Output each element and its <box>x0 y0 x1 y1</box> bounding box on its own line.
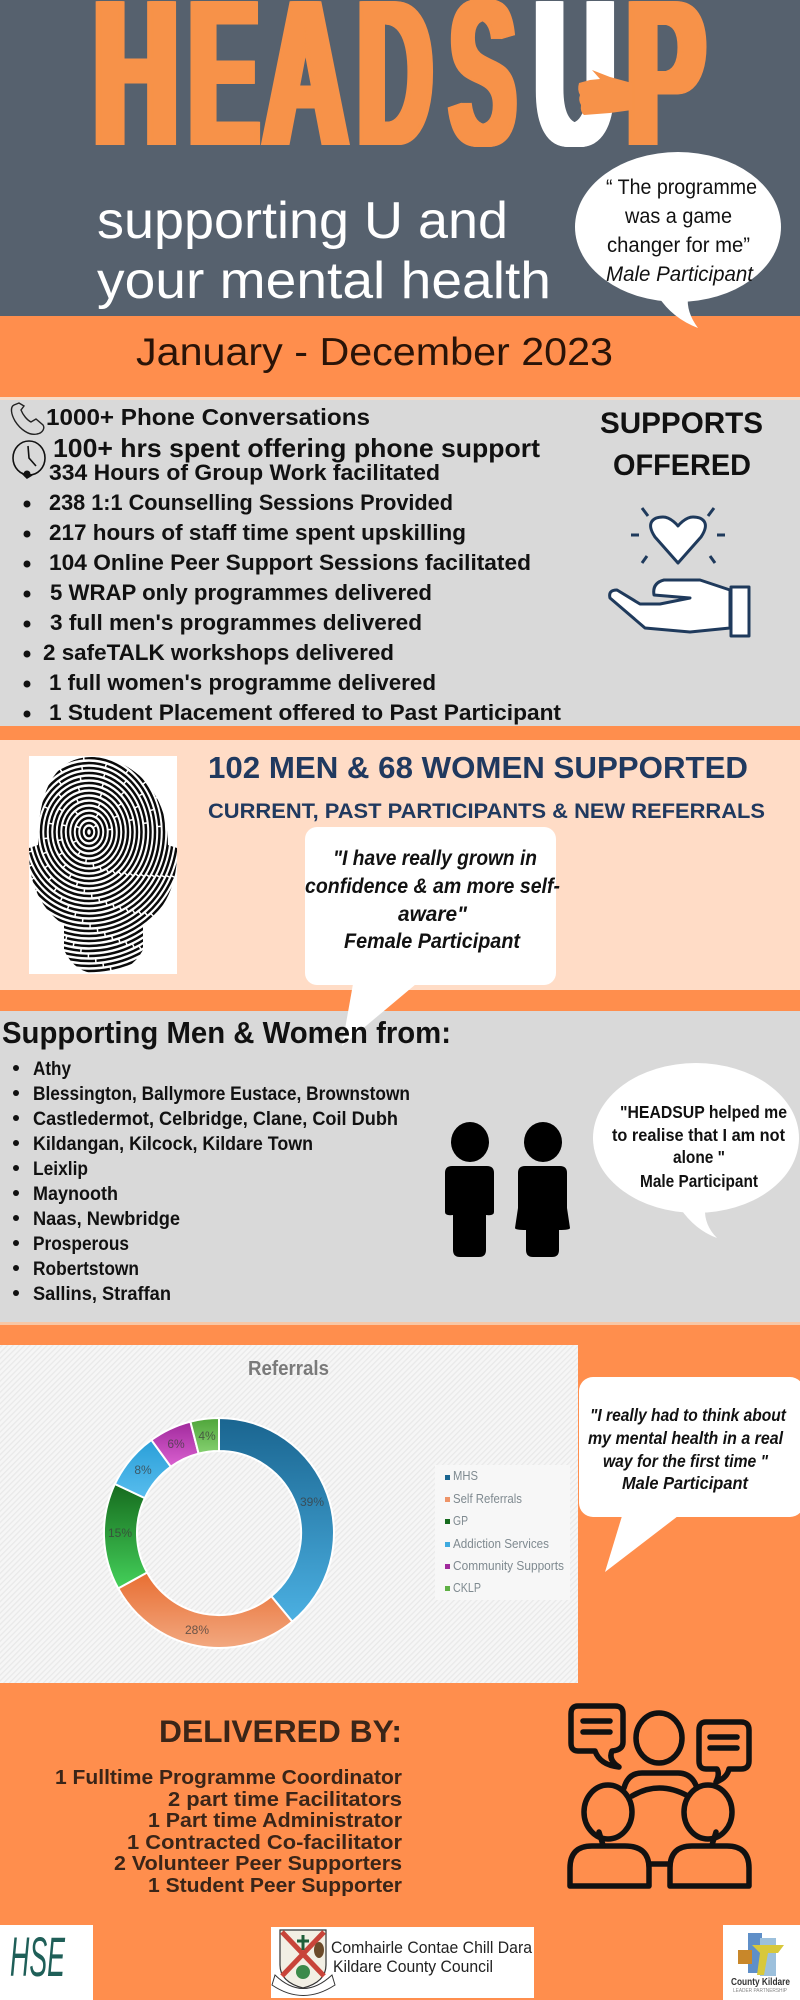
speech bubble: game changer: was a game <box>624 205 732 228</box>
icon: phone <box>11 403 44 434</box>
locations list: Athy <box>33 1059 71 1080</box>
icon: heart in hand <box>610 508 749 636</box>
donut labels <box>108 1429 324 1637</box>
chart: referrals donut <box>0 1345 578 1683</box>
speech bubble: mental health in a real way <box>579 1377 800 1572</box>
locations list: Blessington, Ballymore Eustace, Brownstown <box>33 1084 410 1105</box>
legend: Addiction Services <box>453 1537 549 1551</box>
title: HEADSUP logo <box>94 0 706 190</box>
speech bubble: game changer: changer for me” <box>607 234 750 257</box>
logo: Kildare County Council: Comhairle Contae Chill Dara <box>331 1938 533 1957</box>
speech bubble: game changer: “ The programme <box>606 176 757 199</box>
supports list: 2 safeTALK workshops delivered <box>43 640 394 665</box>
legend <box>435 1465 570 1600</box>
speech bubble: not alone: to realise that I am not <box>612 1125 785 1145</box>
supports list <box>43 404 562 725</box>
legend: Self Referrals <box>453 1492 522 1506</box>
donut labels: 28% <box>185 1623 209 1637</box>
supports list: 3 full men's programmes delivered <box>50 610 422 635</box>
speech bubble: not alone: alone " <box>673 1147 725 1167</box>
supports offered heading: SUPPORTS <box>600 407 763 440</box>
subtitle <box>97 192 551 310</box>
supports list: 238 1:1 Counselling Sessions Provided <box>49 490 453 515</box>
supports list: 100+ hrs spent offering phone support <box>53 433 540 463</box>
icon: helping hand <box>578 70 629 115</box>
header band <box>0 0 800 316</box>
icon: clock <box>13 441 45 478</box>
speech bubble: game changer <box>575 152 781 328</box>
legend: GP <box>453 1514 468 1528</box>
orange divider <box>0 990 800 1011</box>
icon: man and woman figures <box>445 1122 570 1257</box>
heading: supporting men and women: Supporting Men & Women from: <box>2 1015 451 1050</box>
subtitle: your mental health <box>97 252 551 310</box>
legend: CKLP <box>453 1581 481 1595</box>
logo: Kildare County Council: Kildare County Council <box>333 1957 493 1976</box>
team list: 2 Volunteer Peer Supporters <box>114 1853 402 1875</box>
locations list: Maynooth <box>33 1184 118 1205</box>
heading: delivered by: DELIVERED BY: <box>159 1713 402 1749</box>
crest <box>272 1930 335 1996</box>
speech bubble: not alone <box>593 1063 799 1238</box>
orange divider <box>0 726 800 740</box>
locations list <box>13 1059 410 1305</box>
locations list: Castledermot, Celbridge, Clane, Coil Dubh <box>33 1109 398 1130</box>
icon: group conversation <box>570 1706 749 1886</box>
speech bubble: grown in confidence: aware" <box>398 903 468 926</box>
locations list: Naas, Newbridge <box>33 1209 180 1230</box>
supports offered heading <box>600 407 763 482</box>
supports list: 1 Student Placement offered to Past Participant <box>49 700 562 725</box>
speech bubble: grown in confidence: confidence & am more self- <box>305 875 560 898</box>
date band <box>0 316 800 397</box>
locations list: Prosperous <box>33 1234 129 1255</box>
panel: people supported <box>0 740 800 990</box>
icon: fingerprint head <box>28 756 178 974</box>
subtitle: supporting U and <box>97 192 508 250</box>
panel: supports offered <box>0 397 800 726</box>
supports list: 334 Hours of Group Work facilitated <box>49 460 440 485</box>
chart title: Referrals <box>248 1358 329 1380</box>
locations list: Robertstown <box>33 1259 139 1280</box>
supports list: 1 full women's programme delivered <box>49 670 436 695</box>
list bullets <box>24 470 30 718</box>
speech bubble: not alone: "HEADSUP helped me <box>620 1102 787 1122</box>
supports list: 5 WRAP only programmes delivered <box>50 580 432 605</box>
locations list: Sallins, Straffan <box>33 1284 171 1305</box>
logo: County Kildare Leader Partnership <box>723 1925 800 2000</box>
panel: locations <box>0 1011 800 1322</box>
logo: Kildare County Council <box>271 1927 534 1998</box>
team list: 1 Student Peer Supporter <box>148 1875 402 1897</box>
logo: HSE <box>0 1925 93 2000</box>
legend: MHS <box>453 1469 478 1483</box>
speech bubble: grown in confidence <box>305 827 560 1046</box>
donut labels: 4% <box>198 1429 216 1443</box>
team list: 1 Fulltime Programme Coordinator <box>55 1767 402 1789</box>
team list: 1 Contracted Co-facilitator <box>127 1832 402 1854</box>
speech bubble: grown in confidence: Female Participant <box>344 930 521 953</box>
speech bubble: mental health in a real way: way for the first time " <box>603 1451 769 1471</box>
donut labels: 39% <box>300 1495 324 1509</box>
team list <box>55 1767 402 1897</box>
speech bubble: mental health in a real way: my mental health in a real <box>588 1428 784 1448</box>
locations list: Leixlip <box>33 1159 88 1180</box>
panel: orange lower background <box>0 1322 800 2000</box>
speech bubble: grown in confidence: "I have really grown in <box>333 847 537 870</box>
team list: 1 Part time Administrator <box>148 1810 402 1832</box>
supports list: 104 Online Peer Support Sessions facilitated <box>49 550 531 575</box>
logo: County Kildare Leader Partnership: LEADER PARTNERSHIP <box>733 1988 788 1994</box>
heading: men and women supported: 102 MEN & 68 WOMEN SUPPORTED <box>208 751 748 785</box>
locations list: Kildangan, Kilcock, Kildare Town <box>33 1134 313 1155</box>
supports list: 1000+ Phone Conversations <box>46 404 370 430</box>
speech bubble: game changer: Male Participant <box>606 263 754 286</box>
donut labels: 15% <box>108 1526 132 1540</box>
speech bubble: mental health in a real way: Male Participant <box>622 1473 749 1493</box>
logo: HSE: HSE <box>10 1925 65 1988</box>
subheading: CURRENT, PAST PARTICIPANTS & NEW REFERRALS <box>208 800 765 823</box>
legend: Community Supports <box>453 1559 564 1573</box>
speech bubble: not alone: Male Participant <box>640 1171 758 1191</box>
donut slices <box>104 1418 334 1648</box>
team list: 2 part time Facilitators <box>168 1789 402 1811</box>
supports offered heading: OFFERED <box>613 449 751 482</box>
date heading: January - December 2023 <box>136 331 613 374</box>
supports list: 217 hours of staff time spent upskilling <box>49 520 466 545</box>
donut labels: 6% <box>167 1437 185 1451</box>
donut labels: 8% <box>134 1463 152 1477</box>
